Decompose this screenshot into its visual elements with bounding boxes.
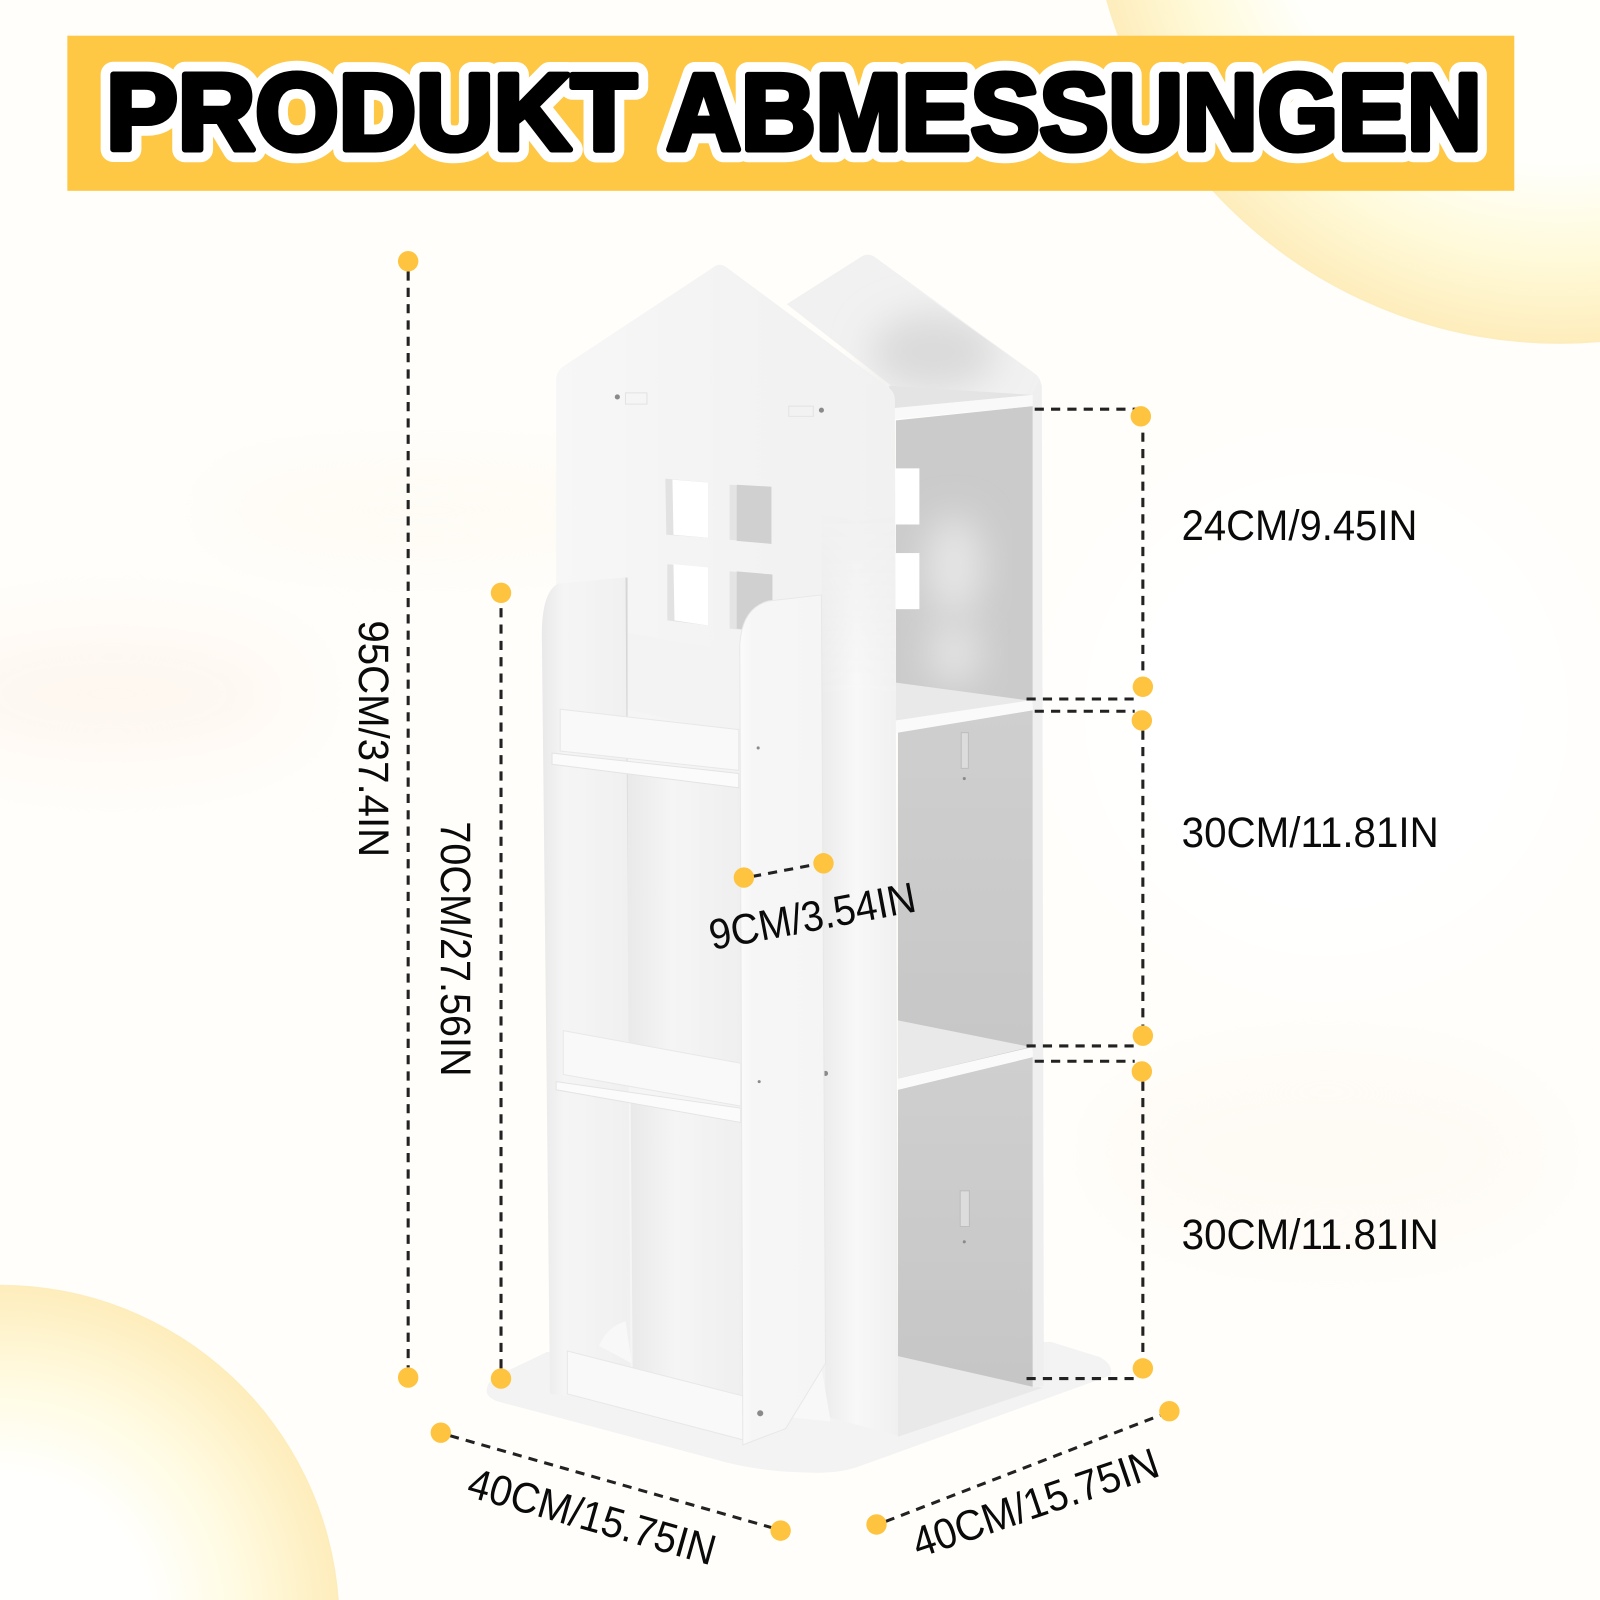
label: top compartment: 24CM/9.45IN xyxy=(1182,502,1417,550)
rack fins xyxy=(599,1321,831,1421)
rack pocket 3 xyxy=(567,1351,743,1440)
dimension: front width xyxy=(431,1422,791,1575)
title: ABMESSUNGEN xyxy=(666,52,1482,173)
right side edge panel xyxy=(1033,380,1044,1388)
dimension: bottom compartment xyxy=(1027,1046,1439,1379)
label: middle compartment: 30CM/11.81IN xyxy=(1182,809,1439,857)
dimension: middle compartment xyxy=(1027,699,1439,1046)
dimension: rack height xyxy=(431,583,511,1389)
side windows xyxy=(895,468,919,524)
label: rack height: 70CM/27.56IN xyxy=(431,821,479,1077)
panel markings xyxy=(626,393,813,416)
decorative circle: bottom left xyxy=(0,1285,339,1600)
decorative circle: top right xyxy=(1106,0,1600,344)
title: ABMESSUNGEN xyxy=(666,52,1482,173)
top compartment xyxy=(895,406,1033,720)
dimension: total height xyxy=(349,251,418,1388)
top shelf board xyxy=(894,395,1033,419)
rack screws xyxy=(757,746,966,1416)
rear roof panel xyxy=(787,255,1041,408)
dimension: rack depth xyxy=(705,853,920,960)
right column shading xyxy=(821,510,898,1436)
product: white house-shaped bookshelf xyxy=(487,255,1111,1473)
rack back panel lower xyxy=(626,578,743,1429)
label: side width: 40CM/15.75IN xyxy=(906,1439,1165,1568)
second shelf xyxy=(896,683,1033,733)
dimension: side width xyxy=(866,1401,1180,1568)
front house panel xyxy=(556,265,898,1436)
middle compartment back xyxy=(898,710,1033,1082)
label: bottom compartment: 30CM/11.81IN xyxy=(1182,1211,1439,1259)
floor inside lower compartment xyxy=(898,1356,1043,1437)
left rack side panel xyxy=(542,578,631,1396)
label: total height: 95CM/37.4IN xyxy=(349,620,397,857)
dimension: top compartment xyxy=(1035,406,1417,697)
title: PRODUKT xyxy=(106,52,637,173)
label: front width: 40CM/15.75IN xyxy=(463,1459,721,1575)
rack pocket 2 xyxy=(556,1031,741,1122)
screws xyxy=(615,394,828,1076)
rack pocket 1 xyxy=(552,709,739,788)
right rack side panel xyxy=(740,595,826,1445)
title xyxy=(106,52,1482,173)
shelf base plate xyxy=(487,1342,1111,1473)
title: PRODUKT xyxy=(106,52,637,173)
title banner xyxy=(67,36,1514,191)
third shelf xyxy=(898,1020,1033,1090)
interior slots xyxy=(960,733,969,1227)
bottom compartment back xyxy=(898,1057,1033,1387)
label: rack depth: 9CM/3.54IN xyxy=(705,874,920,960)
front panel windows xyxy=(665,479,772,633)
